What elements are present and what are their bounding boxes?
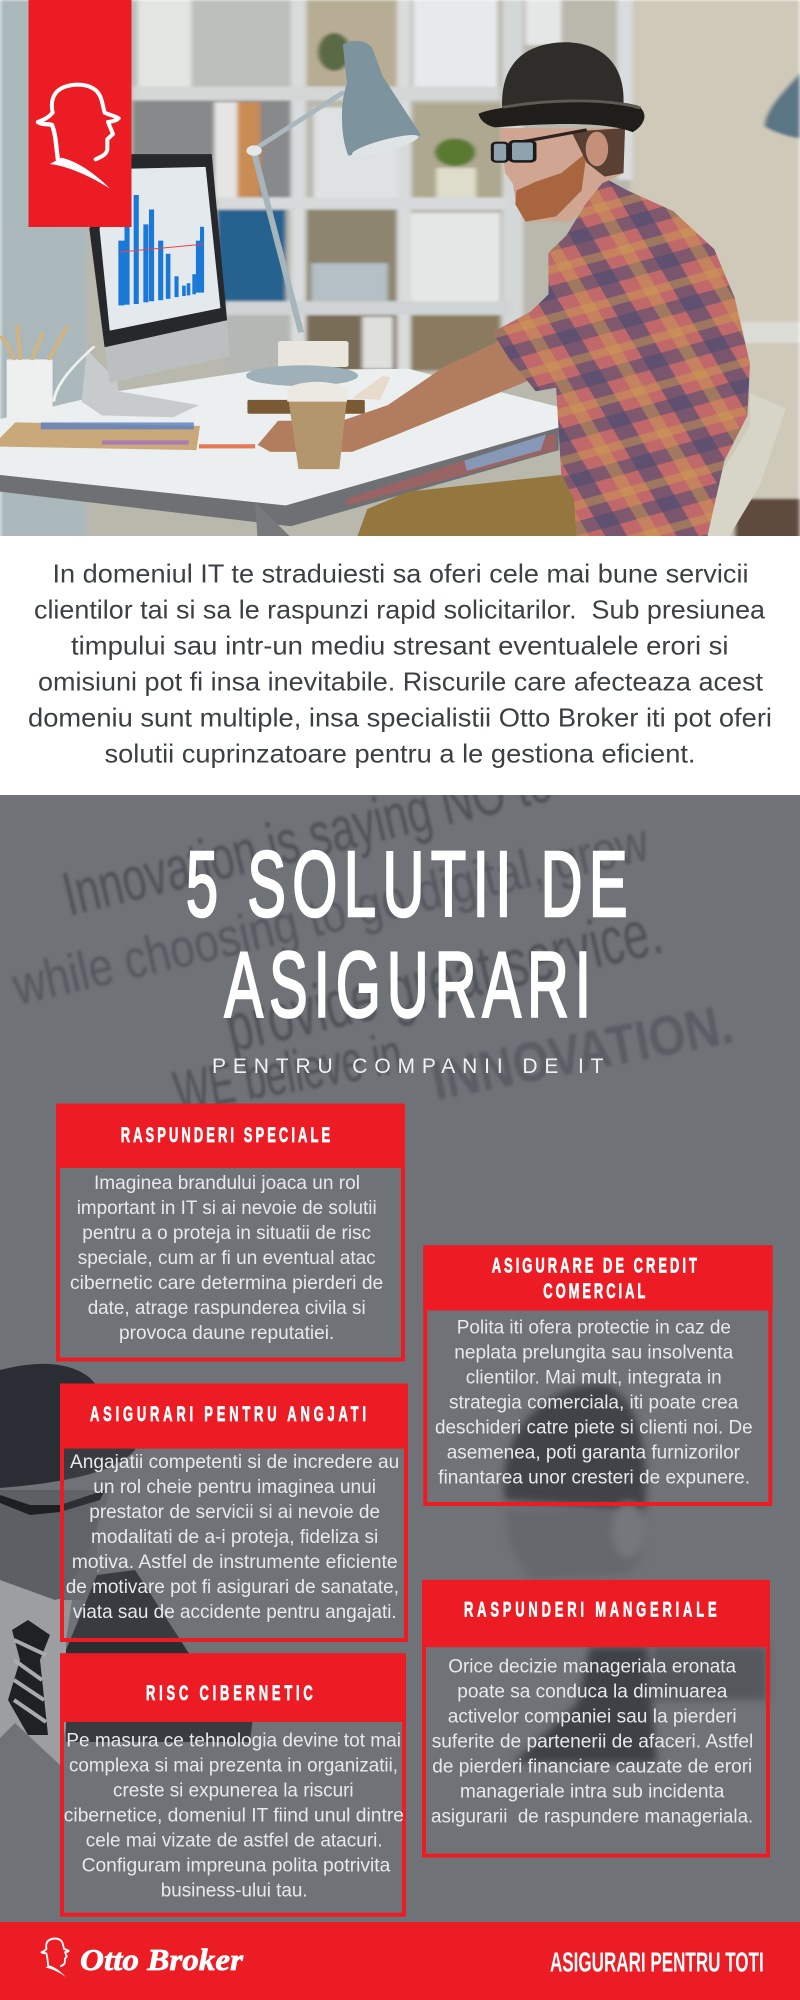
card: raspunderi speciale: speciale, cum ar fi un eventual atac <box>78 1247 376 1269</box>
card: raspunderi speciale: date, atrage raspunderea civila si <box>88 1297 366 1319</box>
man head with beard, glasses and bowler hat <box>479 42 644 222</box>
card: asigurare de credit comercial: Polita iti ofera protectie in caz de <box>457 1317 731 1339</box>
hero photo: man in bowler hat at desk <box>0 0 800 540</box>
card: risc cibernetic: cibernetice, domeniul IT fiind unul dintre <box>64 1805 404 1827</box>
card: risc cibernetic: creste si expunerea la riscuri <box>113 1780 354 1802</box>
card: asigurare de credit comercial: COMERCIAL <box>543 1279 645 1303</box>
card: asigurare de credit comercial: finantarea unor cresteri de expunere. <box>438 1467 750 1489</box>
card: raspunderi speciale: important in IT si ai nevoie de solutii <box>77 1197 377 1219</box>
logo: man silhouette <box>38 85 119 189</box>
intro paragraph: omisiuni pot fi insa inevitabile. Riscurile care afecteaza acest <box>38 666 764 696</box>
card: risc cibernetic: RISC CIBERNETIC <box>146 1681 313 1705</box>
card: asigurare de credit comercial <box>423 1245 773 1504</box>
blurred wall lettering: Innovation is saying NO to <box>56 746 558 930</box>
card: asigurare de credit comercial: strategia comerciala, iti poate crea <box>449 1392 738 1414</box>
intro paragraph <box>0 536 800 795</box>
card: raspunderi manageriale: activelor companiei sau la pierderi <box>448 1705 737 1727</box>
card: raspunderi manageriale: poate sa conduca la diminuarea <box>457 1680 727 1702</box>
card: asigurari pentru angajati: modalitati de a-i proteja, fideliza si <box>91 1526 378 1548</box>
red logo panel <box>28 0 132 227</box>
card: asigurare de credit comercial: neplata prelungita sau insolventa <box>454 1342 733 1364</box>
chair <box>704 393 786 540</box>
man in bowler hat, left <box>0 1364 260 1765</box>
card: raspunderi speciale <box>56 1104 405 1360</box>
dark photo background <box>0 746 800 1922</box>
card: asigurari pentru angajati <box>60 1384 408 1640</box>
card: asigurari pentru angajati: prestator de servicii si ai nevoie de <box>89 1501 380 1523</box>
card: raspunderi manageriale: asigurarii de raspundere manageriala. <box>431 1805 753 1827</box>
card: raspunderi manageriale: manageriale intra sub incidenta <box>460 1780 724 1802</box>
card: asigurare de credit comercial: deschideri catre piete si clienti noi. De <box>435 1417 753 1439</box>
card: asigurari pentru angajati: un rol cheie pentru imaginea unui <box>93 1476 376 1498</box>
intro paragraph: solutii cuprinzatoare pentru a le gestiona eficient. <box>104 738 696 768</box>
card: risc cibernetic: business-ului tau. <box>161 1880 308 1902</box>
card: raspunderi manageriale: de pierderi financiare cauzate de erori <box>432 1755 752 1777</box>
card: raspunderi manageriale: suferite de partenerii de afaceri. Astfel <box>432 1730 753 1752</box>
footer bar <box>0 1922 800 2000</box>
card: risc cibernetic: complexa si mai prezenta in organizatii, <box>69 1755 398 1777</box>
intro paragraph: timpului sau intr-un mediu stresant eventualele erori si <box>71 630 728 660</box>
card: risc cibernetic: Configuram impreuna polita potrivita <box>82 1855 390 1877</box>
brand name: Otto Broker <box>80 1942 244 1977</box>
card: risc cibernetic: Pe masura ce tehnologia devine tot mai <box>66 1730 401 1752</box>
card: risc cibernetic <box>60 1653 406 1915</box>
card: raspunderi manageriale: RASPUNDERI MANGERIALE <box>464 1597 717 1621</box>
man head and shoulders, right <box>504 1384 767 1763</box>
trousers <box>356 474 620 540</box>
slogan: ASIGURARI PENTRU TOTI <box>550 1947 764 1978</box>
card: asigurare de credit comercial: ASIGURARE DE CREDIT <box>492 1253 697 1277</box>
card: risc cibernetic: cele mai vizate de astfel de atacuri. <box>86 1830 383 1852</box>
title <box>186 833 627 1037</box>
intro paragraph: domeniu sunt multiple, insa specialistii Otto Broker iti pot oferi <box>28 702 772 732</box>
footer logo icon <box>42 1938 69 1977</box>
card: asigurare de credit comercial: asemenea, poti garanta furnizorilor <box>447 1442 740 1464</box>
card: asigurari pentru angajati: motiva. Astfel de instrumente eficiente <box>72 1551 398 1573</box>
card: asigurari pentru angajati: de motivare pot fi asigurari de sanatate, <box>66 1576 399 1598</box>
card: raspunderi manageriale <box>422 1580 769 1856</box>
card: raspunderi speciale: provoca daune reputatiei. <box>119 1322 334 1344</box>
blurred wall lettering: INNOVATION. <box>426 992 738 1112</box>
card: raspunderi manageriale: Orice decizie manageriala eronata <box>448 1655 736 1677</box>
blurred wall lettering: WE believe in <box>169 1021 407 1125</box>
title: ASIGURARI <box>224 934 591 1037</box>
card: raspunderi speciale: RASPUNDERI SPECIALE <box>121 1123 330 1147</box>
card: asigurari pentru angajati: Angajatii competenti si de incredere au <box>70 1451 399 1473</box>
desk lamp <box>246 41 421 386</box>
title: 5 SOLUTII DE <box>186 833 627 936</box>
intro paragraph: In domeniul IT te straduiesti sa oferi cele mai bune servicii <box>52 558 748 588</box>
card: asigurare de credit comercial: clientilor. Mai mult, integrata in <box>466 1367 722 1389</box>
card: raspunderi speciale: Imaginea brandului joaca un rol <box>94 1172 360 1194</box>
card: asigurari pentru angajati: viata sau de accidente pentru angajati. <box>73 1601 397 1623</box>
coffee cup <box>287 382 348 469</box>
blurred wall lettering: while choosing to go digital, grow <box>6 812 655 1017</box>
card: raspunderi speciale: pentru a o proteja in situatii de risc <box>82 1222 371 1244</box>
arm and hand <box>258 336 528 452</box>
monitor <box>54 154 230 417</box>
subtitle: PENTRU COMPANII DE IT <box>212 1055 604 1078</box>
desk <box>0 369 559 540</box>
intro paragraph: clientilor tai si sa le raspunzi rapid solicitarilor. Sub presiunea <box>34 594 766 624</box>
card: asigurari pentru angajati: ASIGURARI PENTRU ANGJATI <box>90 1402 366 1426</box>
blurred wall lettering <box>12 795 732 1104</box>
pencil cup <box>0 325 67 419</box>
notebook and swatches <box>0 376 390 450</box>
card: raspunderi speciale: cibernetic care determina pierderi de <box>70 1272 383 1294</box>
plaid shirt <box>492 177 750 540</box>
